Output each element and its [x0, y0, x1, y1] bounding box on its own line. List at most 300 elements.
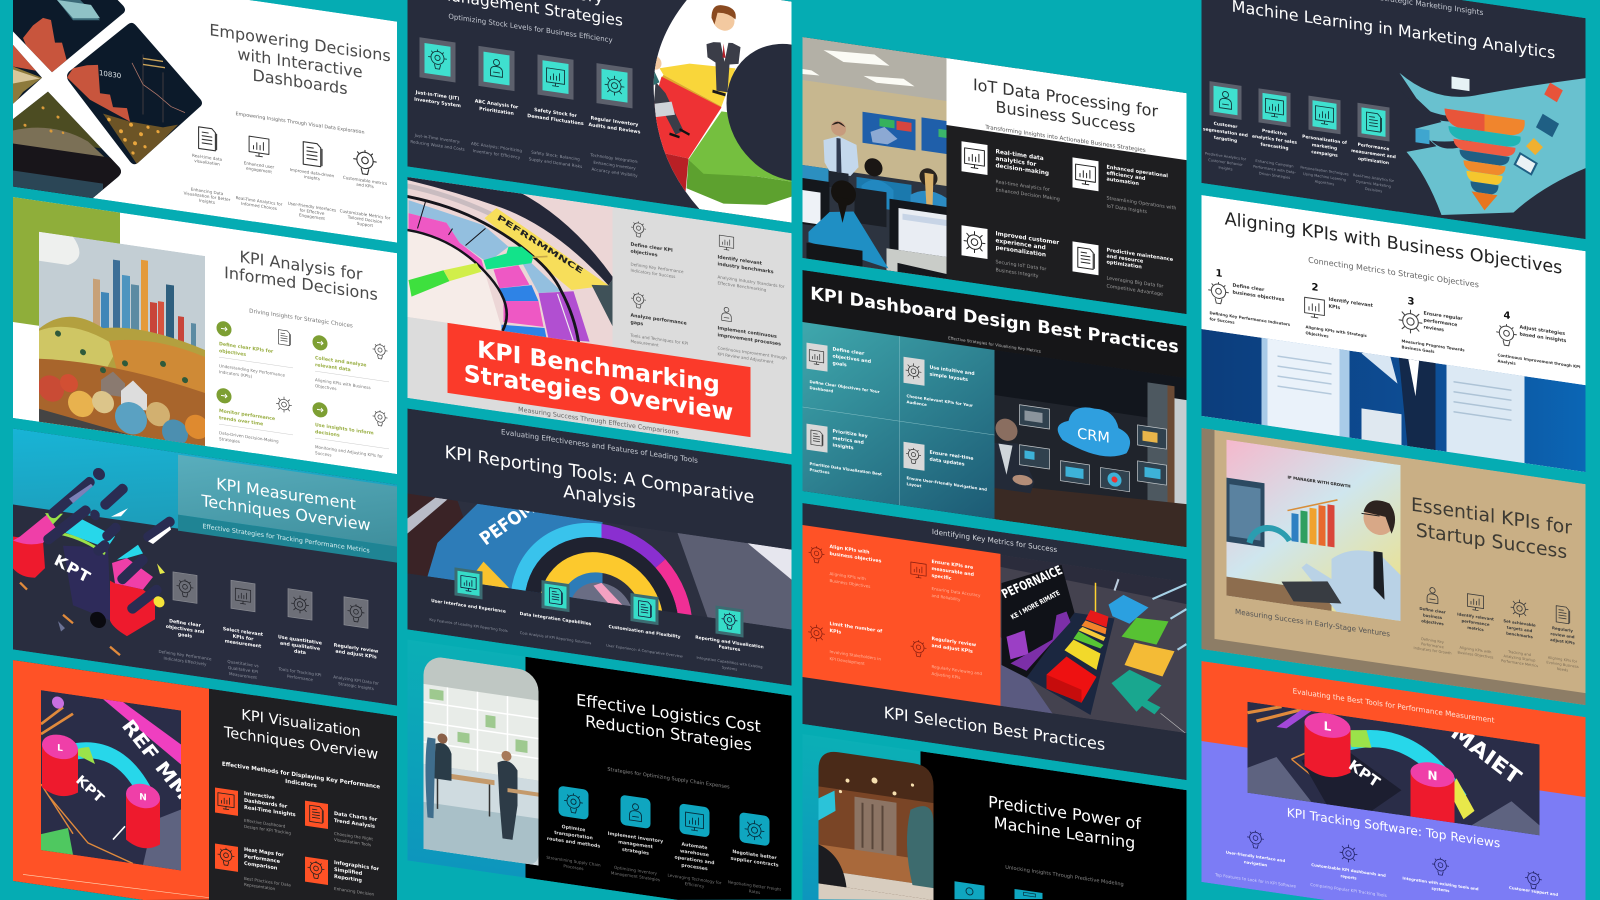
- item grid: Data Charts for: [334, 811, 378, 823]
- orange panel with four items: and adjust KPIs: [931, 643, 973, 655]
- image: CRM cloud photo: [994, 382, 1186, 547]
- panel: Logistics Cost slide: Processes: [563, 863, 584, 871]
- panel: IoT Data Processing slide: [802, 37, 1186, 314]
- labels: Real-time data: [192, 153, 222, 162]
- image: gauge with cylinders: N: [139, 792, 147, 804]
- panel: KPI Reporting Tools slide: [408, 408, 792, 686]
- left panel with four items: metrics and: [832, 435, 864, 446]
- illustration: businessman on pie chart: [654, 0, 792, 222]
- orange panel with four items: Involving Stakeholders in: [830, 649, 881, 662]
- subtitle: Indicators: [285, 779, 317, 789]
- panel: KPI Dashboard Design slide: [802, 270, 1186, 547]
- steps: 2: [1312, 282, 1318, 294]
- item grid: Improved customer: [995, 231, 1059, 246]
- labels: [1203, 119, 1396, 167]
- steps: business objectives: [1232, 290, 1285, 303]
- item grid: automation: [1106, 176, 1139, 187]
- image: 3D performance blocks: PEFORNAICE: [999, 563, 1065, 601]
- left panel with four items: Prioritize Data Visualization Best: [810, 461, 882, 477]
- panel: Machine Learning in Marketing slide: Using Machine Learning: [1303, 172, 1346, 182]
- title: Informed Decisions: [224, 263, 378, 304]
- title panel: Effective Strategies for Tracking Performance Metrics: [202, 523, 370, 555]
- steps: Analysis: [1498, 358, 1516, 366]
- labels: Integration with existing tools and: [1402, 875, 1479, 891]
- item grid: relevant data: [315, 362, 351, 373]
- panel: KPI Measurement slide: Measurement: [229, 671, 257, 680]
- labels: KPIs for: [233, 634, 254, 643]
- labels: Identify relevant: [1457, 611, 1494, 622]
- image: KPT gauge: KPT: [1346, 756, 1384, 791]
- panel: KPI Measurement slide: Quantitative vs: [227, 659, 259, 668]
- labels: optimization: [1358, 156, 1389, 166]
- labels: Inventory System: [414, 96, 461, 109]
- icon row: [1427, 586, 1570, 624]
- labels: Regular Inventory: [591, 115, 638, 128]
- panel: KPI Selection slide: [802, 503, 1186, 780]
- icon row: [1210, 81, 1390, 141]
- item grid: optimization: [1106, 259, 1142, 271]
- labels: metrics: [1467, 625, 1484, 632]
- image: KPT gauge: [1248, 702, 1540, 836]
- panel: Inventory Management slide: Enhancing Inventory: [593, 160, 636, 171]
- labels: Data Integration Capabilities: [520, 611, 592, 627]
- item grid: Performance: [244, 854, 281, 865]
- labels: Enhanced user: [244, 160, 275, 170]
- item grid: Real-time data: [995, 149, 1044, 162]
- subtitle: Unlocking Insights Through Predictive Modeling: [1005, 865, 1124, 888]
- title: Analysis: [563, 482, 636, 513]
- panel: KPI Reporting Tools slide: Cost Analysis of KPI Reporting Solutions: [520, 631, 591, 645]
- labels: Audits and Reviews: [589, 122, 641, 136]
- item grid: Analyze performance: [630, 313, 687, 327]
- item grid: KPI Review and Adjustment: [717, 351, 774, 364]
- labels: Negotiate better: [732, 849, 777, 861]
- labels: adjust KPIs: [1550, 637, 1575, 646]
- image: factory with robot: [818, 749, 934, 900]
- steps: [1209, 267, 1581, 375]
- left panel with four items: Choose Relevant KPIs for Your: [906, 393, 973, 408]
- labels: Customizable metrics: [343, 175, 387, 186]
- title: Empowering Decisions: [209, 20, 391, 66]
- steps: Business Goals: [1401, 344, 1435, 354]
- labels: Support: [357, 221, 373, 228]
- panel: Essential KPIs slide: Analyzing Startup: [1504, 654, 1536, 663]
- image: analyst with chart: IF MANAGER WITH GROWTH: [1288, 475, 1351, 489]
- item grid: Real-time Analytics for: [995, 179, 1050, 193]
- labels: Regularly: [1552, 625, 1573, 633]
- labels: segmentation and: [1203, 126, 1248, 139]
- panel: KPI Reporting Tools slide: Key Features of Leading KPI Reporting Tools: [429, 618, 508, 633]
- panel: Essential KPIs slide: Aligning KPIs for: [1548, 656, 1578, 664]
- labels: performance: [1462, 618, 1490, 627]
- labels: Customer: [1214, 121, 1238, 130]
- image: diamond dashboard photo: [13, 0, 202, 198]
- labels: Regularly review: [334, 642, 379, 655]
- left panel with four items: Layout: [906, 481, 921, 488]
- labels: forecasting: [1260, 142, 1289, 152]
- labels: Define clear: [1419, 606, 1446, 615]
- panel: Inventory Management slide: Just-in-Time Inventory:: [414, 132, 460, 144]
- image: 3D bar chart landscape: [39, 232, 205, 446]
- subtitle: Effective Strategies for Visualizing Key Metrics: [948, 335, 1041, 354]
- panel: KPI Measurement slide: Analyzing KPI Data for: [333, 674, 379, 686]
- left panel with four items: Prioritize key: [832, 428, 868, 440]
- panel: KPI Measurement slide: [13, 428, 397, 706]
- labels: Customization and Flexibility: [608, 624, 681, 640]
- illustration: marketing funnel: [1400, 51, 1586, 236]
- steps: Aligning KPIs with Strategic: [1306, 324, 1368, 338]
- item grid: decisions: [315, 429, 340, 439]
- title banner: [448, 323, 750, 437]
- orange panel with four items: Regularly review: [931, 636, 977, 648]
- labels: Customer support and: [1509, 885, 1558, 897]
- item grid: [216, 320, 389, 466]
- title: Techniques Overview: [223, 724, 378, 763]
- labels: User-Friendly Interfaces: [288, 201, 336, 213]
- panel: Predictive Power slide: [802, 734, 1186, 900]
- item grid: [215, 787, 379, 900]
- steps: 1: [1216, 268, 1222, 280]
- panel: Machine Learning in Marketing slide: Algorithms: [1315, 180, 1334, 186]
- caption: Measuring Success in Early-Stage Ventures: [1235, 607, 1390, 639]
- labels: targets and: [1507, 625, 1532, 633]
- labels: campaigns: [1311, 149, 1338, 159]
- panel: KPI Tracking Software slide: Comparing Popular KPI Tracking Tools: [1310, 882, 1387, 898]
- icon row: [454, 567, 744, 638]
- labels: transportation: [554, 830, 593, 842]
- labels: Customizable Metrics for: [340, 208, 391, 221]
- subtitle: Strategies for Optimizing Supply Chain Expenses: [607, 767, 730, 791]
- panel: Machine Learning in Marketing slide: Enhancing Campaign: [1255, 159, 1294, 168]
- panel: Machine Learning in Marketing slide: Customer Behavior: [1208, 158, 1243, 167]
- orange panel with four items: measurable and: [931, 566, 974, 578]
- subtitle: Empowering Insights Through Visual Data Exploration: [235, 111, 365, 136]
- item grid: Success: [315, 450, 331, 457]
- item grid: Indicators (KPIs): [219, 369, 253, 379]
- item grid: Effective Benchmarking: [717, 280, 767, 292]
- labels: [1419, 606, 1575, 646]
- labels: [166, 618, 378, 658]
- left panel with four items: Practices: [809, 467, 830, 475]
- panel: Machine Learning in Marketing slide: Insights: [1218, 165, 1233, 172]
- title: Essential KPIs for: [1411, 494, 1572, 539]
- item grid: Visualization Tools: [334, 837, 371, 847]
- image: performance gauge: [408, 177, 612, 346]
- labels: measurement and: [1351, 148, 1396, 160]
- labels: [432, 598, 764, 651]
- orange panel with four items: Adjusting KPIs: [931, 671, 960, 680]
- labels: objectives and: [166, 624, 204, 635]
- steps: Defining Key Performance Indicators: [1210, 310, 1291, 327]
- item grid: improvement processes: [717, 332, 781, 348]
- image: gauge with cylinders: L: [57, 743, 63, 754]
- panel: Machine Learning in Marketing slide: Real-Time Analytics for: [1353, 173, 1395, 183]
- item grid: Reporting: [334, 874, 362, 884]
- icon row: [173, 572, 368, 628]
- title panel: [178, 455, 397, 563]
- orange panel with four items: Ensuring Data Accuracy: [931, 586, 981, 598]
- panel: KPI Benchmarking slide: [408, 165, 792, 454]
- icon row: [1247, 830, 1542, 890]
- steps: reviews: [1423, 324, 1444, 333]
- labels: [1226, 844, 1558, 900]
- item grid: and resource: [1106, 253, 1144, 265]
- labels: benchmarks: [1506, 630, 1534, 639]
- panel: Inventory Management slide: Safety Stock: Balancing: [531, 150, 580, 162]
- steps: Ensure regular: [1423, 310, 1463, 322]
- steps: based on insights: [1520, 331, 1566, 344]
- item grid: Trend Analysis: [334, 818, 375, 830]
- item grid: personalization: [995, 245, 1046, 259]
- item grid: analytics for: [995, 156, 1036, 168]
- item grid: Comparison: [244, 861, 278, 872]
- labels: Demand Fluctuations: [527, 113, 584, 127]
- orange panel with four items: Align KPIs with: [830, 544, 869, 556]
- item grid: Business Integrity: [995, 267, 1039, 279]
- image: gauge dial: [408, 494, 792, 630]
- steps: 4: [1504, 310, 1510, 322]
- item grid: decision-making: [995, 163, 1049, 177]
- subtitle: Measuring Success Through Effective Comparisons: [518, 406, 679, 437]
- labels: Just-in-Time (JIT): [415, 90, 459, 102]
- labels: Set achievable: [1503, 618, 1536, 628]
- labels: [414, 89, 641, 136]
- left panel with four items: Ensure real-time: [929, 450, 973, 462]
- item grid: Design for KPI Tracking: [244, 824, 291, 836]
- item grid: objectives: [219, 348, 246, 358]
- labels: routes and methods: [547, 836, 600, 850]
- orange panel with four items: and Reliability: [931, 593, 961, 602]
- labels: objectives: [1421, 618, 1444, 626]
- orange panel with four items: Aligning KPIs with: [830, 571, 866, 581]
- labels: Implement inventory: [608, 831, 663, 845]
- item grid: Tools and Techniques for KPI: [630, 332, 688, 346]
- item grid: Continuous Improvement through: [717, 345, 787, 360]
- image: 3D performance blocks: [1000, 555, 1186, 733]
- image: KPT gauge: L: [1324, 719, 1332, 734]
- item grid: Simplified: [334, 867, 363, 877]
- panel: Essential KPIs slide: Performance Metrics: [1501, 659, 1538, 668]
- panel: KPI Reporting Tools slide: User Experience: A Comparative Overview: [606, 644, 683, 659]
- labels: Visualization for Better: [184, 190, 231, 202]
- subtitle: Transforming Insights into Actionable Business Strategies: [984, 125, 1146, 154]
- illustration: KPT streaks: [13, 456, 171, 663]
- subtitle: Evaluating Effectiveness and Features of Leading Tools: [501, 427, 698, 465]
- title: Aligning KPIs with Business Objectives: [1225, 209, 1562, 279]
- item grid: Indicators for Success: [630, 268, 675, 279]
- panel: Logistics Cost slide: [408, 640, 792, 900]
- title: KPI Tracking Software: Top Reviews: [1287, 806, 1500, 851]
- item grid: Understanding Key Performance: [219, 363, 285, 378]
- title panel: Techniques Overview: [200, 491, 371, 535]
- labels: supplier contracts: [730, 856, 779, 869]
- left panel with four items: data updates: [929, 457, 965, 468]
- item grid: Identify relevant: [717, 254, 763, 267]
- item grid: industry benchmarks: [717, 261, 774, 275]
- labels: strategies: [622, 847, 649, 857]
- panel: KPI Measurement slide: Strategic Insights: [338, 681, 374, 691]
- item grid: Data-Driven Decision-Making: [219, 430, 279, 444]
- panel: Inventory Management slide: [408, 0, 792, 222]
- labels: navigation: [1244, 859, 1267, 868]
- panel: Machine Learning in Marketing slide: Predictive Analytics for: [1205, 152, 1247, 162]
- title: KPI Reporting Tools: A Comparative: [445, 443, 754, 508]
- labels: data: [294, 649, 306, 656]
- panel: Logistics Cost slide: Leveraging Technology for: [668, 872, 722, 885]
- title: IoT Data Processing for: [973, 75, 1158, 121]
- title: with Interactive: [237, 44, 363, 82]
- panel: Inventory Management slide: Technology Integration:: [589, 152, 639, 164]
- title: KPI Dashboard Design Best Practices: [810, 284, 1179, 358]
- image: documents and businessman: [1202, 329, 1586, 472]
- panel: Inventory Management slide: Reducing Waste and Costs: [410, 139, 465, 152]
- steps: Define clear: [1232, 283, 1265, 293]
- left panel with four items: Define Clear Objectives for Your: [810, 379, 880, 394]
- labels: engagement: [246, 166, 272, 174]
- item grid: [630, 220, 787, 366]
- panel: Logistics Cost slide: Efficiency: [685, 881, 705, 889]
- panel: Aligning KPIs slide: [1202, 195, 1586, 481]
- panel: Inventory Management slide: Accuracy and Visibility: [591, 166, 638, 178]
- item grid: Analyzing Industry Standards for: [717, 274, 785, 289]
- orange panel with four items: Limit the number of: [830, 621, 883, 635]
- panel: KPI Reporting Tools slide: Integration Capabilities with Existing: [697, 656, 762, 669]
- labels: measurement: [225, 638, 262, 650]
- panel: Inventory Management slide: Supply and Demand Risks: [529, 156, 582, 169]
- item grid: Enhanced Decision Making: [995, 187, 1060, 203]
- left panel with four items: insights: [833, 442, 854, 451]
- labels: User Interface and Experience: [431, 598, 506, 615]
- left panel with four items: goals: [833, 360, 847, 368]
- panel: Inventory Management slide: Inventory for Efficiency: [473, 148, 521, 160]
- panel: KPI Measurement slide: Indicators Effectively: [164, 656, 207, 667]
- panel: KPI Measurement slide: Qualitative KPI: [228, 665, 258, 674]
- panel: Machine Learning in Marketing slide: Personalization Techniques: [1300, 165, 1349, 176]
- panel: Machine Learning in Marketing slide: Driven Strategies: [1259, 171, 1290, 180]
- panel: Essential KPIs slide: Performance: [1421, 642, 1445, 649]
- illustration: KPT streaks: KPT: [51, 551, 94, 587]
- image: gauge with cylinders: [41, 690, 181, 870]
- labels: Safety Stock for: [534, 107, 578, 119]
- item grid: efficiency and: [1106, 170, 1146, 182]
- orange panel with four items: KPIs: [830, 628, 841, 636]
- panel: KPI Visualization slide: [13, 660, 397, 900]
- item grid: experience and: [995, 238, 1046, 252]
- item grid: Measurement: [630, 339, 659, 348]
- labels: Enhancing Data: [191, 186, 224, 196]
- steps: KPIs: [1328, 304, 1340, 311]
- item grid: Enhancing Decision: [334, 886, 375, 897]
- image: gauge with cylinders: KPT: [73, 773, 107, 807]
- image: gauge with cylinders: REF MM: [117, 715, 195, 804]
- labels: User-friendly interface and: [1226, 850, 1285, 863]
- orange panel with four items: Business Objectives: [830, 578, 870, 589]
- panel: Logistics Cost slide: Rates: [749, 888, 760, 895]
- left panel with four items: Ensure User-Friendly Navigation and: [906, 475, 987, 492]
- labels: Use quantitative: [278, 634, 322, 647]
- labels: Define clear: [169, 618, 202, 629]
- item grid: gaps: [630, 321, 643, 327]
- orange panel with four items: specific: [931, 573, 952, 582]
- title: Effective Logistics Cost: [576, 690, 761, 736]
- labels: and adjust KPIs: [335, 649, 377, 661]
- item grid: Aligning KPIs with Business: [315, 377, 371, 390]
- orange panel with four items: Regularly Reviewing and: [931, 664, 982, 676]
- item grid: Use insights to inform: [315, 422, 374, 437]
- item grid: Monitor performance: [219, 408, 275, 422]
- labels: Automate: [682, 842, 707, 851]
- labels: Insights: [199, 198, 215, 205]
- panel: Logistics Cost slide: Management Strategies: [611, 870, 660, 882]
- panel: Essential KPIs slide: [1202, 428, 1586, 705]
- left panel with four items: [802, 322, 994, 519]
- labels: systems: [1431, 886, 1450, 893]
- panel: KPI Reporting Tools slide: Systems: [722, 665, 737, 672]
- panel: Machine Learning in Marketing slide: Performance with Data-: [1253, 165, 1296, 175]
- panel: Inventory Management slide: ABC Analysis: Prioritizing: [471, 141, 522, 153]
- title: KPI Selection Best Practices: [884, 703, 1105, 754]
- labels: Performance: [1358, 142, 1389, 152]
- panel: KPI Tracking Software slide: Top Features to Look for in KPI Software: [1214, 872, 1296, 889]
- left panel with four items: Dashboard: [810, 385, 833, 394]
- labels: [547, 822, 779, 883]
- panel: KPI Tracking Software slide: [1202, 661, 1586, 900]
- item grid: Leveraging Big Data for: [1106, 275, 1163, 290]
- labels: marketing: [1312, 142, 1337, 152]
- subtitle: Evaluating the Best Tools for Performance Measurement: [1293, 686, 1495, 725]
- image: diamond dashboard photo: 10830: [99, 68, 121, 80]
- panel: Essential KPIs slide: Aligning KPIs with: [1460, 646, 1491, 654]
- panel: KPI Measurement slide: Performance: [287, 674, 313, 682]
- panel: Machine Learning in Marketing slide: Decisions: [1365, 187, 1382, 193]
- title: Dashboards: [252, 66, 348, 98]
- item grid: Defining Key Performance: [630, 262, 684, 274]
- item grid: Interactive: [244, 791, 275, 801]
- item grid: Dashboards for: [244, 798, 288, 810]
- item grid: Define clear KPIs for: [219, 341, 274, 355]
- title: KPI Analysis for: [240, 247, 363, 284]
- labels: review and: [1550, 631, 1575, 639]
- item grid: Predictive maintenance: [1106, 247, 1174, 263]
- panel: KPI Measurement slide: Tools for Tracking KPI: [278, 666, 321, 678]
- image: operations room photo: [802, 37, 946, 279]
- title banner: KPI Benchmarking: [477, 335, 720, 399]
- labels: ABC Analysis for: [475, 98, 519, 111]
- item grid: trends over time: [219, 415, 263, 428]
- title: Predictive Power of: [988, 792, 1141, 833]
- steps: for Success: [1210, 316, 1235, 325]
- panel: Logistics Cost slide: Streamlining Supply Chain: [546, 855, 601, 868]
- labels: Select relevant: [223, 626, 264, 638]
- orange panel with four items: [802, 525, 1000, 706]
- item grid: Enhanced operational: [1106, 164, 1168, 179]
- labels: Personalization of: [1302, 134, 1347, 146]
- item grid: IoT Data Insights: [1106, 203, 1147, 215]
- labels: analytics for sales: [1252, 133, 1297, 146]
- item grid: Heat Maps for: [244, 847, 284, 859]
- labels: insights: [304, 174, 320, 181]
- panel: Machine Learning in Marketing slide: [1202, 0, 1586, 239]
- subtitle: Effective Methods for Displaying Key Performance: [222, 762, 380, 791]
- left panel with four items: Use intuitive and: [929, 365, 975, 377]
- item grid: Best Practices for Data: [244, 876, 291, 888]
- panel: KPI Analysis slide: [13, 197, 397, 485]
- left panel with four items: Define clear: [832, 346, 865, 357]
- image: CRM cloud photo: CRM: [1077, 425, 1110, 447]
- panel: Essential KPIs slide: Business Objectives: [1458, 650, 1494, 660]
- item grid: Implement continuous: [717, 325, 777, 340]
- orange panel with four items: business objectives: [830, 551, 882, 565]
